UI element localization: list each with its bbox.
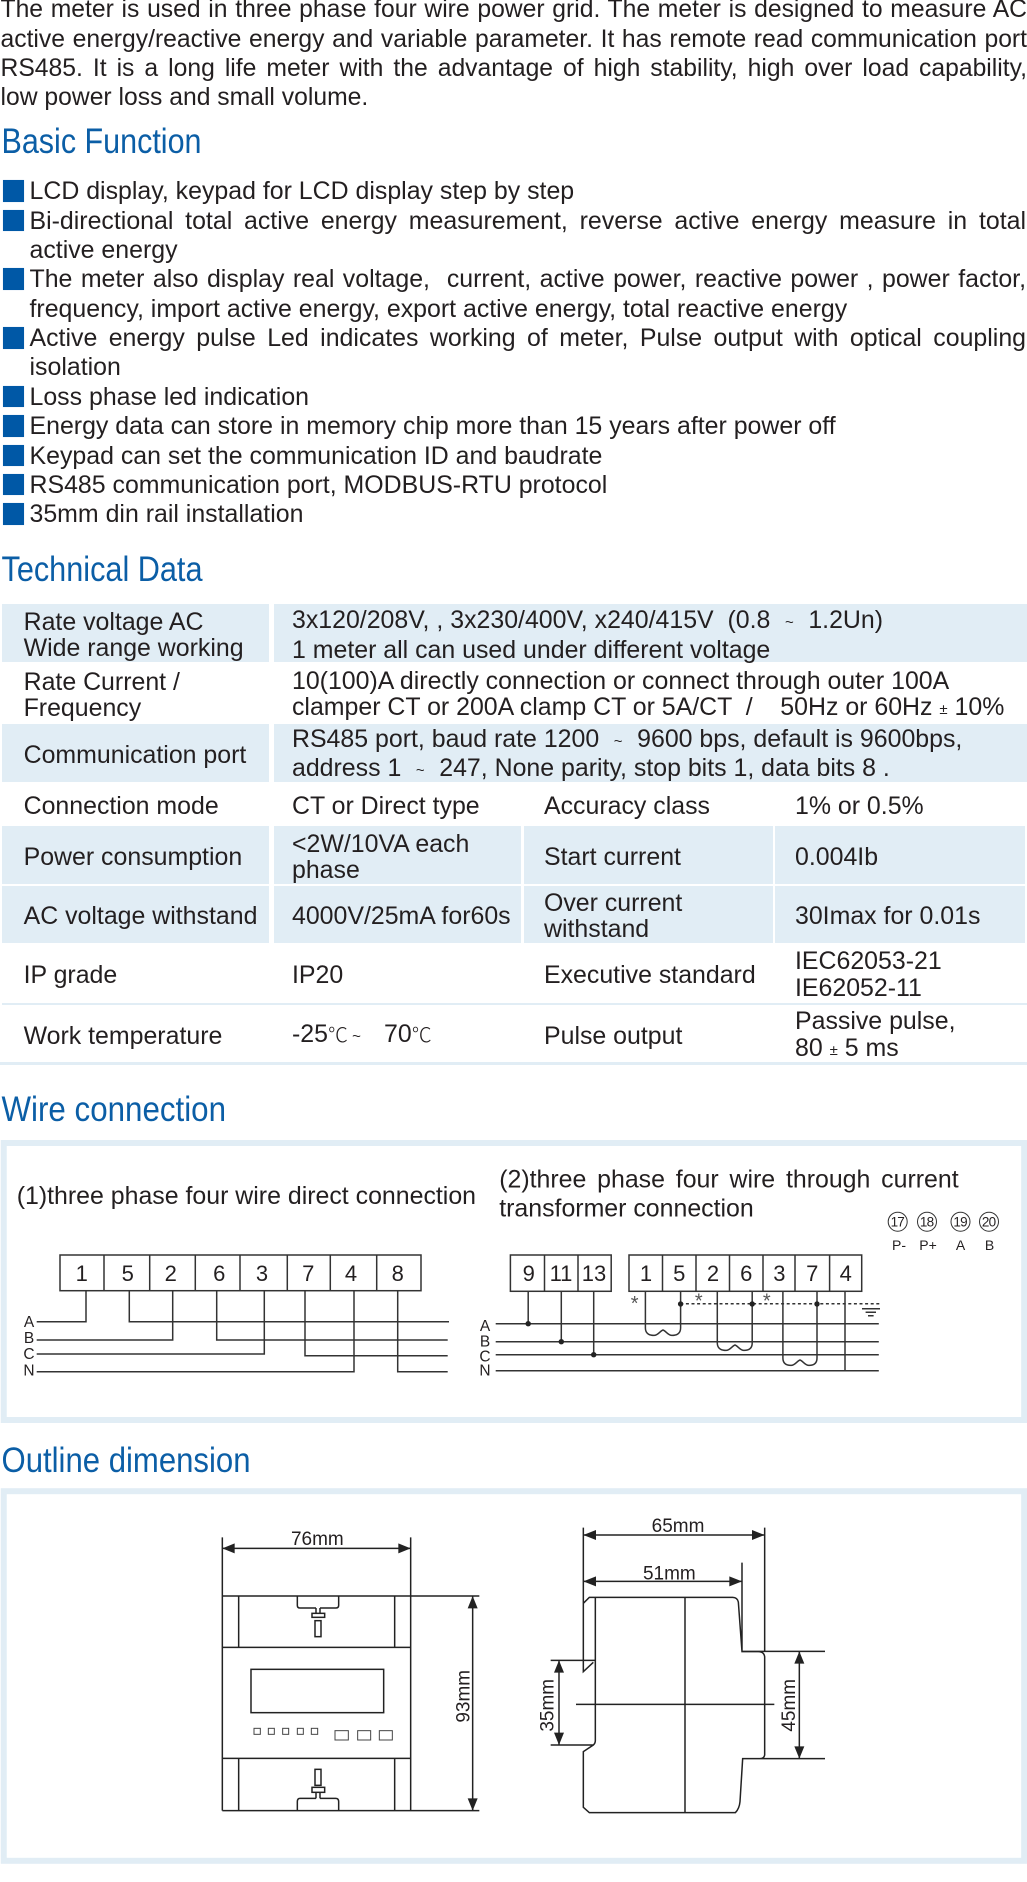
wiring lines (37, 1291, 449, 1372)
diagram 2: current transformer connection (479, 1165, 998, 1380)
phase labels: N (23, 1363, 35, 1380)
diagram 2 title: transformer connection (499, 1195, 754, 1223)
phase labels: N (479, 1363, 491, 1380)
terminal strip 1-8 (60, 1255, 421, 1291)
phase labels: B (480, 1334, 490, 1351)
row: IP grade: IP20 (292, 961, 343, 989)
row: IP grade: IEC62053-21 IE62052-11 (795, 947, 942, 1002)
pulse and RS485 terminals legend: A (956, 1237, 966, 1253)
row: connection mode: Accuracy class (544, 792, 710, 820)
heading: Technical Data: Technical Data (2, 550, 203, 589)
phase labels: C (23, 1346, 35, 1363)
intro paragraph: low power loss and small volume. (0, 84, 368, 111)
row: rate current: Rate Current / Frequency (24, 668, 180, 722)
dimension 35mm: 35mm (537, 1679, 558, 1732)
panel: outline dimension (0, 1488, 1027, 1864)
row: rate voltage: 3x120/208V, , 3x230/400V, x240/415V (0.8 ~ 1.2Un) 1 meter all can used under different voltage (292, 606, 883, 664)
pulse and RS485 terminals legend: B (985, 1237, 994, 1253)
front view drawing (222, 1529, 479, 1811)
bullet list: basic functions (2, 177, 1026, 528)
row: rate current: 10(100)A directly connection or connect through outer 100A clamper CT or 200A clamp CT or 5A/CT / 50Hz or 60Hz ± 10% (292, 667, 1004, 721)
terminal strip 1-8: 7 (302, 1261, 314, 1286)
row: work temperature: Work temperature (24, 1022, 222, 1050)
terminal strip 1-8: 2 (165, 1261, 177, 1286)
row: connection mode: CT or Direct type (292, 792, 480, 820)
diagram 2 title: (2)three phase four wire through current (499, 1165, 959, 1193)
side view drawing (537, 1516, 825, 1813)
bullet list: basic functions: Bi-directional total active energy measurement, reverse active energy measure in total (30, 207, 1026, 235)
dimension 93mm: 93mm (453, 1670, 474, 1723)
bullet list: basic functions: The meter also display real voltage, current, active power, reactive power , power factor, (30, 265, 1026, 293)
diagram 1 title: (1)three phase four wire direct connection (17, 1182, 476, 1210)
intro paragraph: RS485. It is a long life meter with the advantage of high stability, high over load capability, (0, 55, 1027, 82)
bullet list: basic functions: RS485 communication port, MODBUS-RTU protocol (30, 471, 607, 499)
terminal strip 1 5 2 6 3 7 4: 5 (673, 1261, 685, 1286)
row: power consumption: <2W/10VA each phase (292, 830, 469, 884)
bullet list: basic functions: Loss phase led indication (30, 383, 309, 411)
row: AC voltage withstand: AC voltage withstand (24, 902, 257, 930)
row: IP grade (24, 947, 942, 1002)
bullet list: basic functions: frequency, import active energy, export active energy, total reactive energy (30, 295, 847, 323)
phase labels (23, 1314, 35, 1380)
bullet list: basic functions: Active energy pulse Led indicates working of meter, Pulse output with optical coupling (30, 324, 1026, 352)
row: power consumption: Power consumption (24, 843, 242, 871)
row: AC voltage withstand (2, 886, 1025, 943)
row: AC voltage withstand: 4000V/25mA for60s (292, 902, 511, 930)
row: power consumption (2, 826, 1025, 884)
pulse and RS485 terminals legend: 20 (982, 1214, 996, 1230)
terminal strip 9 11 13 (510, 1255, 611, 1291)
terminal strip 1 5 2 6 3 7 4 (629, 1255, 862, 1291)
row: IP grade: IP grade (24, 961, 117, 989)
pulse and RS485 terminals legend: P+ (919, 1237, 937, 1253)
row: power consumption: 0.004Ib (795, 843, 878, 871)
terminal strip 1-8: 8 (392, 1261, 404, 1286)
row: connection mode: 1% or 0.5% (795, 792, 924, 820)
phase labels: C (479, 1349, 491, 1366)
terminal strip 1 5 2 6 3 7 4: 4 (840, 1261, 852, 1286)
row: work temperature: Pulse output (544, 1022, 682, 1050)
terminal strip 9 11 13: 9 (523, 1261, 535, 1286)
intro paragraph: active energy/reactive energy and variable parameter. It has remote read communication port (0, 26, 1027, 53)
pulse and RS485 terminals legend: P- (892, 1237, 906, 1253)
phase labels (479, 1318, 491, 1380)
row: rate voltage: Rate voltage AC Wide range working (24, 608, 244, 662)
polarity stars: * (631, 1293, 639, 1315)
bullet list: basic functions: isolation (30, 353, 121, 381)
dimension arrows (222, 1543, 478, 1811)
connection dots (526, 1301, 820, 1357)
row: power consumption: Start current (544, 843, 681, 871)
terminal strip 1-8: 1 (76, 1261, 88, 1286)
dimension 65mm: 65mm (652, 1516, 704, 1537)
meter side outline (551, 1528, 825, 1813)
pulse and RS485 terminals legend (888, 1212, 998, 1253)
row: work temperature (24, 1007, 956, 1062)
row: work temperature: -25℃ ~ 70℃ (292, 1019, 432, 1048)
dimension arrows (554, 1530, 804, 1759)
row: communication port: Communication port (24, 741, 246, 769)
polarity stars: * (763, 1290, 771, 1312)
bullet list: basic functions: 35mm din rail installation (30, 500, 303, 528)
terminal strip 1 5 2 6 3 7 4: 6 (740, 1261, 752, 1286)
phase labels: A (24, 1314, 35, 1331)
heading: Basic Function: Basic Function (2, 122, 202, 161)
meter front outline (222, 1537, 479, 1811)
intro paragraph (0, 0, 1027, 111)
diagram 1: direct connection (17, 1182, 476, 1380)
row: communication port: RS485 port, baud rate 1200 ~ 9600 bps, default is 9600bps, address 1 ~ 247, None parity, stop bits 1, data bits 8 . (292, 725, 962, 782)
terminal strip 1-8: 6 (213, 1261, 225, 1286)
row: connection mode (24, 792, 924, 820)
technical data table (0, 604, 1027, 1065)
polarity stars: * (695, 1290, 703, 1312)
row: AC voltage withstand: Over current withstand (544, 889, 682, 943)
terminal strip 9 11 13: 11 (550, 1261, 572, 1286)
terminal strip 1 5 2 6 3 7 4: 2 (707, 1261, 719, 1286)
bullet list: basic functions: Keypad can set the communication ID and baudrate (30, 442, 602, 470)
phase labels: B (24, 1330, 34, 1347)
terminal strip 1 5 2 6 3 7 4: 3 (773, 1261, 786, 1286)
terminal strip 1 5 2 6 3 7 4: 7 (806, 1261, 818, 1286)
terminal strip 1-8: 5 (122, 1261, 134, 1286)
row: IP grade: Executive standard (544, 961, 756, 989)
bullet list: basic functions: Energy data can store in memory chip more than 15 years after power off (30, 412, 836, 440)
terminal strip 1-8: 4 (345, 1261, 357, 1286)
heading: Outline dimension: Outline dimension (2, 1441, 250, 1480)
row: rate voltage (2, 604, 1027, 664)
polarity stars (631, 1290, 771, 1315)
row: communication port (2, 724, 1027, 782)
phase labels: A (480, 1318, 491, 1335)
terminal strip 1-8: 3 (256, 1261, 268, 1286)
dimension 76mm: 76mm (291, 1529, 344, 1550)
pulse and RS485 terminals legend: 18 (920, 1214, 934, 1230)
row: work temperature: Passive pulse, 80 ± 5 ms (795, 1007, 956, 1062)
row: connection mode: Connection mode (24, 792, 219, 820)
pulse and RS485 terminals legend: 17 (891, 1214, 904, 1230)
phase lines and current transformer loops (496, 1291, 880, 1371)
bullet list: basic functions: LCD display, keypad for LCD display step by step (30, 177, 574, 205)
terminal strip 9 11 13: 13 (582, 1261, 606, 1286)
heading: Wire connection: Wire connection (2, 1090, 226, 1129)
dimension 51mm: 51mm (643, 1563, 696, 1584)
bullet list: basic functions: active energy (30, 236, 178, 264)
dimension 45mm: 45mm (779, 1679, 800, 1732)
terminal strip 1 5 2 6 3 7 4: 1 (640, 1261, 652, 1286)
pulse and RS485 terminals legend: 19 (953, 1214, 967, 1230)
panel: wire connection (0, 1140, 1027, 1423)
row: AC voltage withstand: 30Imax for 0.01s (795, 902, 980, 930)
